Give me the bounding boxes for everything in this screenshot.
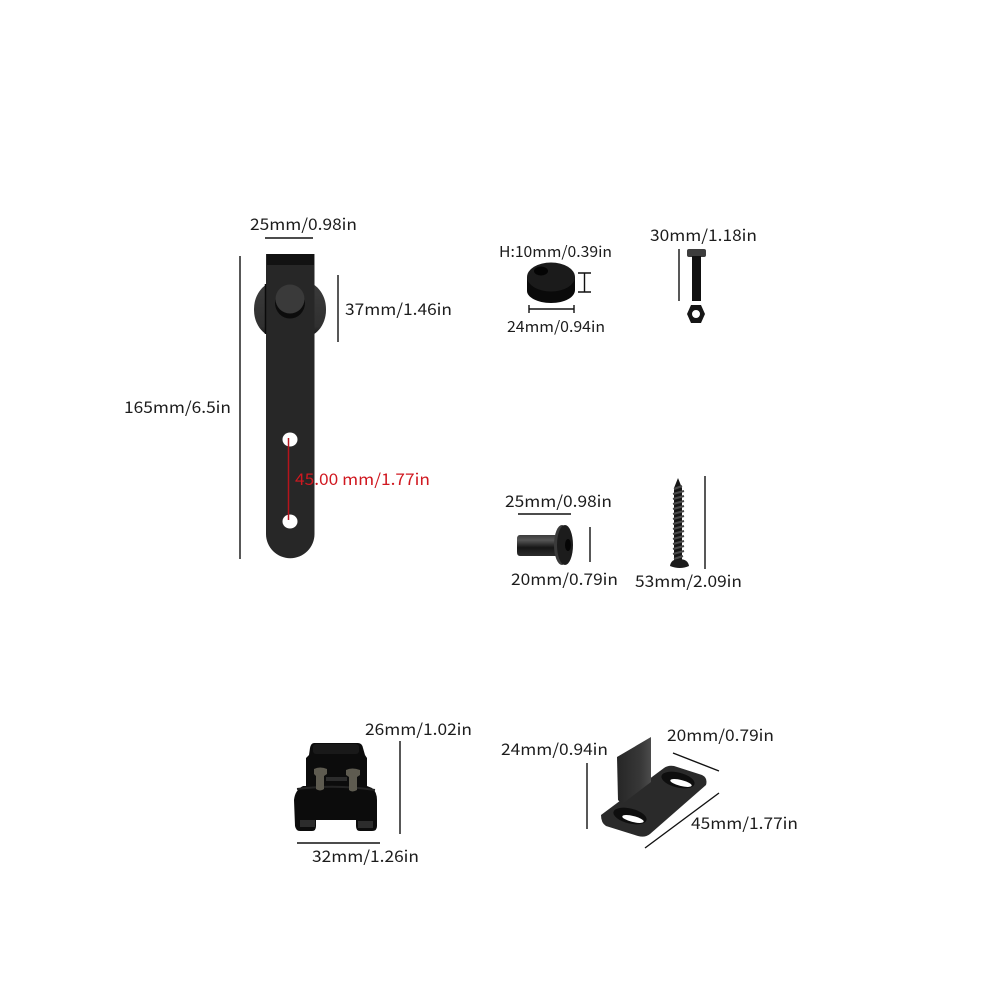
- dimension line: screw length: [704, 476, 706, 569]
- label: guide length: 45mm/1.77in: [691, 810, 798, 834]
- icon: strap mounting holes: [282, 432, 298, 528]
- label: spacer height: H:10mm/0.39in: [499, 241, 612, 262]
- label: block height: 26mm/1.02in: [365, 716, 472, 740]
- label: strap width: 25mm/0.98in: [250, 211, 357, 235]
- dimension line: spacer height: [578, 273, 591, 292]
- label: guide depth: 20mm/0.79in: [667, 722, 774, 746]
- floor guide with dimensions: [501, 722, 798, 848]
- dimension line: guide height: [586, 763, 588, 829]
- icon: hanger strap: [266, 254, 314, 558]
- icon: hex bolt: [687, 249, 706, 301]
- label: block width: 32mm/1.26in: [312, 843, 419, 867]
- icon: anti-jump block: [294, 743, 377, 831]
- icon: floor guide slots: [612, 769, 696, 827]
- icon: sleeve nut: [517, 525, 573, 565]
- dimension line: block width: [297, 842, 380, 844]
- icon: hex nut: [687, 305, 705, 323]
- dimension line: guide depth: [673, 753, 719, 771]
- dimension line: strap width: [265, 237, 313, 239]
- hex bolt with dimensions: [650, 222, 757, 323]
- label: guide height: 24mm/0.94in: [501, 736, 608, 760]
- round spacer with dimensions: [499, 241, 612, 337]
- label: hole spacing: 45.00 mm/1.77in: [295, 466, 430, 490]
- icon: round spacer: [527, 262, 575, 303]
- icon: roller knob: [275, 284, 305, 318]
- dimension line: roller diameter: [337, 275, 339, 342]
- dimension line: block height: [399, 741, 401, 834]
- label: screw length: 53mm/2.09in: [635, 568, 742, 592]
- label: sleeve nut height: 20mm/0.79in: [511, 566, 618, 590]
- dimension line: sleeve nut height: [589, 527, 591, 562]
- icon: strap left shadow line: [264, 284, 266, 334]
- label: bolt length: 30mm/1.18in: [650, 222, 757, 246]
- dimension line: guide length: [645, 793, 719, 848]
- icon: floor guide plate: [601, 766, 706, 837]
- label: sleeve nut length: 25mm/0.98in: [505, 488, 612, 512]
- dimension line: hole spacing: [288, 438, 290, 520]
- icon: strap top fold: [267, 254, 314, 265]
- icon: hanger roller disc: [254, 281, 326, 338]
- hanger strap with dimensions: [124, 211, 452, 559]
- dimension line: strap length: [239, 256, 241, 559]
- icon: floor guide fin: [617, 737, 651, 804]
- sleeve nut with dimensions: [505, 488, 618, 590]
- dimension line: bolt length: [678, 249, 680, 301]
- dimension line: spacer width: [529, 305, 574, 313]
- wood screw with dimensions: [635, 476, 742, 592]
- label: spacer width: 24mm/0.94in: [507, 316, 605, 337]
- dimension line: sleeve nut length: [518, 513, 571, 515]
- anti-jump block with dimensions: [294, 716, 472, 867]
- label: strap length: 165mm/6.5in: [124, 394, 231, 418]
- icon: wood screw: [670, 478, 689, 568]
- label: roller diameter: 37mm/1.46in: [345, 296, 452, 320]
